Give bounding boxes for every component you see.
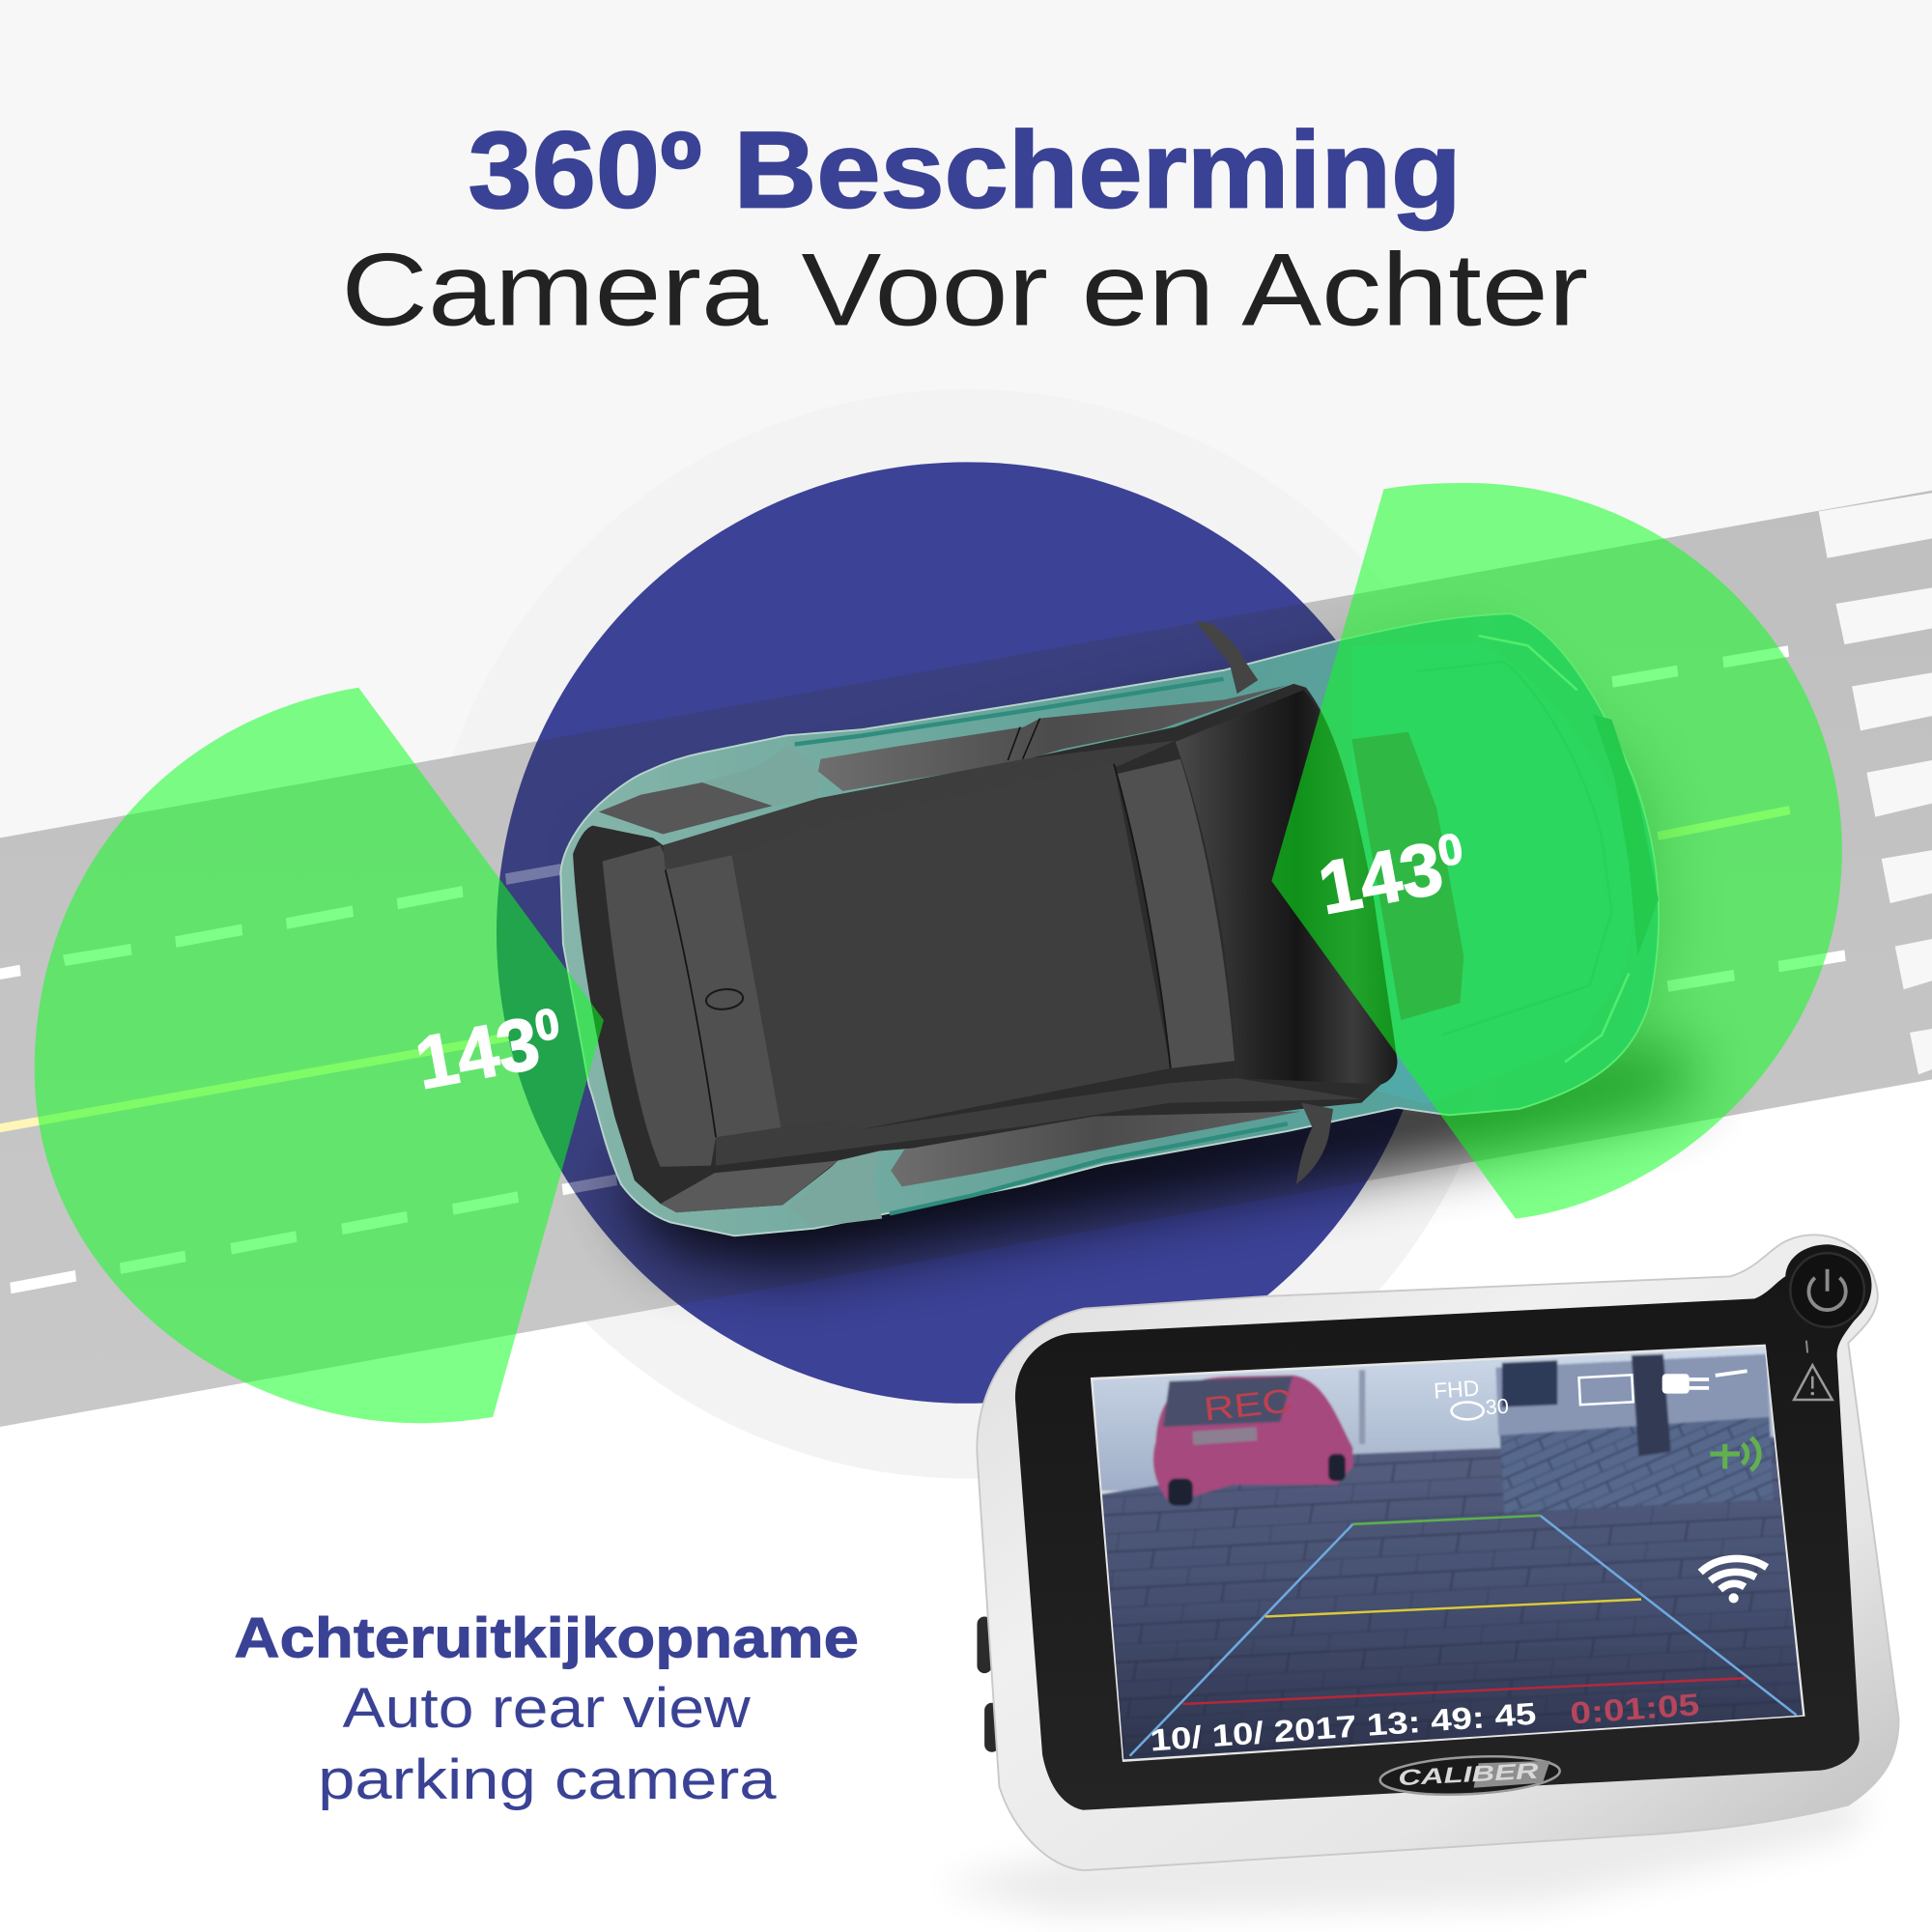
road markings: dashes bbox=[0, 645, 1846, 1293]
monitor shadow bbox=[936, 1793, 1873, 1916]
lower quarter panel bbox=[661, 1161, 838, 1212]
pillar lines upper bbox=[1008, 719, 1040, 760]
plug icon bbox=[1662, 1369, 1747, 1394]
indicator tick bbox=[1806, 1341, 1807, 1353]
headlight bottom bbox=[1565, 974, 1629, 1062]
camera mini icon bbox=[1452, 1403, 1484, 1419]
screen frame bbox=[1091, 1345, 1805, 1762]
title bbox=[341, 108, 1588, 348]
upper roof band bbox=[663, 741, 1176, 870]
camera image bbox=[1084, 1343, 1811, 1775]
roof outlines bbox=[666, 764, 1171, 1137]
camera image pavement bbox=[1084, 1435, 1811, 1775]
rear glass stripe bbox=[666, 855, 781, 1137]
parking guide lines bbox=[1130, 1516, 1797, 1756]
roof panel bbox=[732, 764, 1171, 1130]
left green viewing sector bbox=[35, 688, 604, 1423]
right angle label: 0 bbox=[1435, 825, 1466, 876]
left angle label: 0 bbox=[531, 1000, 563, 1051]
caption line one: Auto rear view bbox=[343, 1677, 751, 1740]
screen bbox=[1084, 1343, 1811, 1775]
black bezel bbox=[1015, 1244, 1872, 1810]
lower windscreen panel bbox=[1351, 732, 1463, 1020]
antenna icon bbox=[1710, 1438, 1759, 1470]
front roof stripe bbox=[1118, 759, 1235, 1068]
car bbox=[560, 613, 1659, 1236]
hood bbox=[1351, 643, 1634, 1104]
side rails bbox=[795, 679, 1288, 1213]
bottom mirror bbox=[1296, 1103, 1333, 1184]
left angle label: 143 bbox=[410, 1002, 546, 1105]
lower roof band bbox=[716, 1078, 1361, 1166]
wifi icon bbox=[1700, 1558, 1767, 1602]
caption heading: Achteruitkijkopname bbox=[234, 1607, 859, 1670]
heading regular: Camera Voor en Achter bbox=[341, 232, 1588, 348]
upper side window bbox=[818, 685, 1288, 791]
top mirror bbox=[1195, 621, 1258, 694]
headlight top bbox=[1479, 636, 1577, 690]
teal lower pillar bbox=[788, 1151, 882, 1227]
greenhouse bbox=[573, 684, 1397, 1212]
upper quarter panel bbox=[599, 782, 773, 835]
brand logo bbox=[1379, 1752, 1561, 1799]
hood crease bbox=[1417, 662, 1611, 1035]
brand logo: CALIBER bbox=[1398, 1758, 1540, 1790]
power button bbox=[1790, 1253, 1864, 1327]
rear window bbox=[603, 845, 716, 1167]
front grille bbox=[1593, 715, 1659, 956]
monitor bbox=[977, 1235, 1899, 1870]
pole bbox=[1359, 1370, 1365, 1444]
camera image sky bbox=[1084, 1343, 1811, 1491]
right angle label: 143 bbox=[1313, 827, 1449, 930]
faint halo circle bbox=[423, 389, 1512, 1479]
warning icon bbox=[1794, 1365, 1833, 1400]
REC label: REC bbox=[1202, 1382, 1294, 1429]
windscreen bbox=[1176, 690, 1397, 1084]
crosswalk bbox=[1819, 493, 1932, 1074]
frame rate label: 30 bbox=[1485, 1394, 1510, 1419]
FHD label: FHD bbox=[1433, 1375, 1480, 1404]
blue circle bbox=[497, 462, 1404, 1404]
silver housing bbox=[977, 1235, 1899, 1870]
car shadow bbox=[579, 629, 1688, 1269]
date stamp: 10/ 10/ 2017 13: 49: 45 bbox=[1149, 1696, 1537, 1757]
caption line two: parking camera bbox=[318, 1748, 777, 1811]
right green viewing sector bbox=[1271, 483, 1842, 1218]
road bbox=[0, 491, 1932, 1427]
battery icon bbox=[1579, 1375, 1634, 1405]
parked car image bbox=[1153, 1375, 1353, 1506]
heading bold: 360º Bescherming bbox=[469, 108, 1462, 230]
car body bbox=[560, 613, 1659, 1236]
side buttons bbox=[977, 1616, 999, 1752]
lower side window bbox=[891, 1112, 1301, 1186]
road centre line bbox=[0, 806, 1790, 1132]
timer: 0:01:05 bbox=[1569, 1687, 1700, 1730]
picture in picture bbox=[1495, 1354, 1773, 1513]
caption bbox=[234, 1607, 859, 1811]
shark fin antenna bbox=[705, 987, 744, 1011]
teal upper pillar bbox=[702, 746, 818, 806]
